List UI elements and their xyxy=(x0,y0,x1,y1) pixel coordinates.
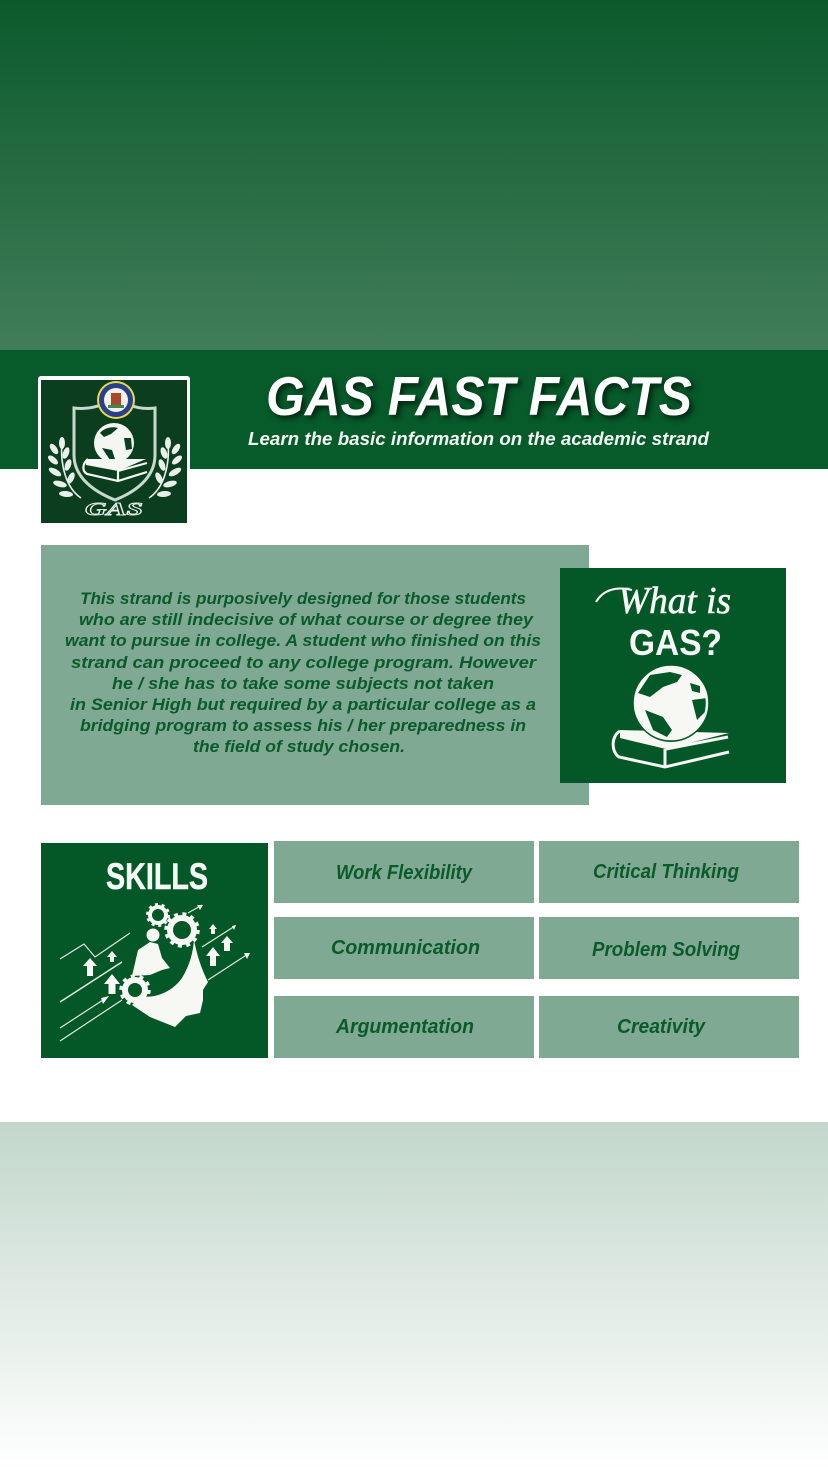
shield outline xyxy=(74,398,155,500)
right laurel xyxy=(149,437,184,498)
icon: growth lines xyxy=(60,905,248,1041)
skill: Creativity: Creativity xyxy=(617,1016,706,1038)
panel: skills xyxy=(41,843,268,1058)
description text: This strand is purposively designed for those students xyxy=(80,590,526,608)
description text: bridging program to assess his / her preparedness in xyxy=(80,717,526,735)
skill: Argumentation: Argumentation xyxy=(335,1016,474,1038)
icon: up arrows xyxy=(83,924,233,994)
logo globe xyxy=(94,423,134,463)
panel: description xyxy=(41,545,589,805)
skill: Critical Thinking: Critical Thinking xyxy=(593,861,739,883)
top gradient background xyxy=(0,0,828,350)
skill: Creativity xyxy=(539,996,799,1058)
skill: Work Flexibility: Work Flexibility xyxy=(336,862,473,884)
description text: want to pursue in college. A student who finished on this xyxy=(65,632,541,650)
description text: the field of study chosen. xyxy=(193,738,405,756)
logo badge xyxy=(38,376,190,526)
skill: Problem Solving: Problem Solving xyxy=(592,939,740,961)
logo GAS text: GAS xyxy=(85,499,143,519)
skill: Work Flexibility xyxy=(274,841,534,903)
skill: Argumentation xyxy=(274,996,534,1058)
header band xyxy=(0,350,828,469)
icon: head with gears xyxy=(121,904,208,1027)
title: GAS FAST FACTS xyxy=(266,365,692,427)
icon: arrow heads xyxy=(101,905,250,1004)
left laurel xyxy=(46,437,81,498)
seal xyxy=(97,381,135,419)
icon: globe xyxy=(633,666,709,742)
description text: he / she has to take some subjects not taken xyxy=(112,675,494,693)
heading: What is: What is xyxy=(618,580,731,622)
subtitle: Learn the basic information on the academic strand xyxy=(248,429,710,449)
skill: Critical Thinking xyxy=(539,841,799,903)
description text xyxy=(65,590,541,756)
skill: Problem Solving xyxy=(539,917,799,979)
description text: who are still indecisive of what course or degree they xyxy=(79,611,534,629)
panel: what is GAS xyxy=(560,568,786,783)
description text: in Senior High but required by a particular college as a xyxy=(70,696,536,714)
skill: Communication: Communication xyxy=(331,937,480,959)
skill: Communication xyxy=(274,917,534,979)
icon: book xyxy=(613,730,729,767)
heading: skills: SKILLS xyxy=(106,856,208,897)
bottom gradient background xyxy=(0,1122,828,1472)
logo book xyxy=(83,459,147,481)
description text: strand can proceed to any college program. However xyxy=(71,654,538,672)
heading: GAS?: GAS? xyxy=(629,622,722,663)
